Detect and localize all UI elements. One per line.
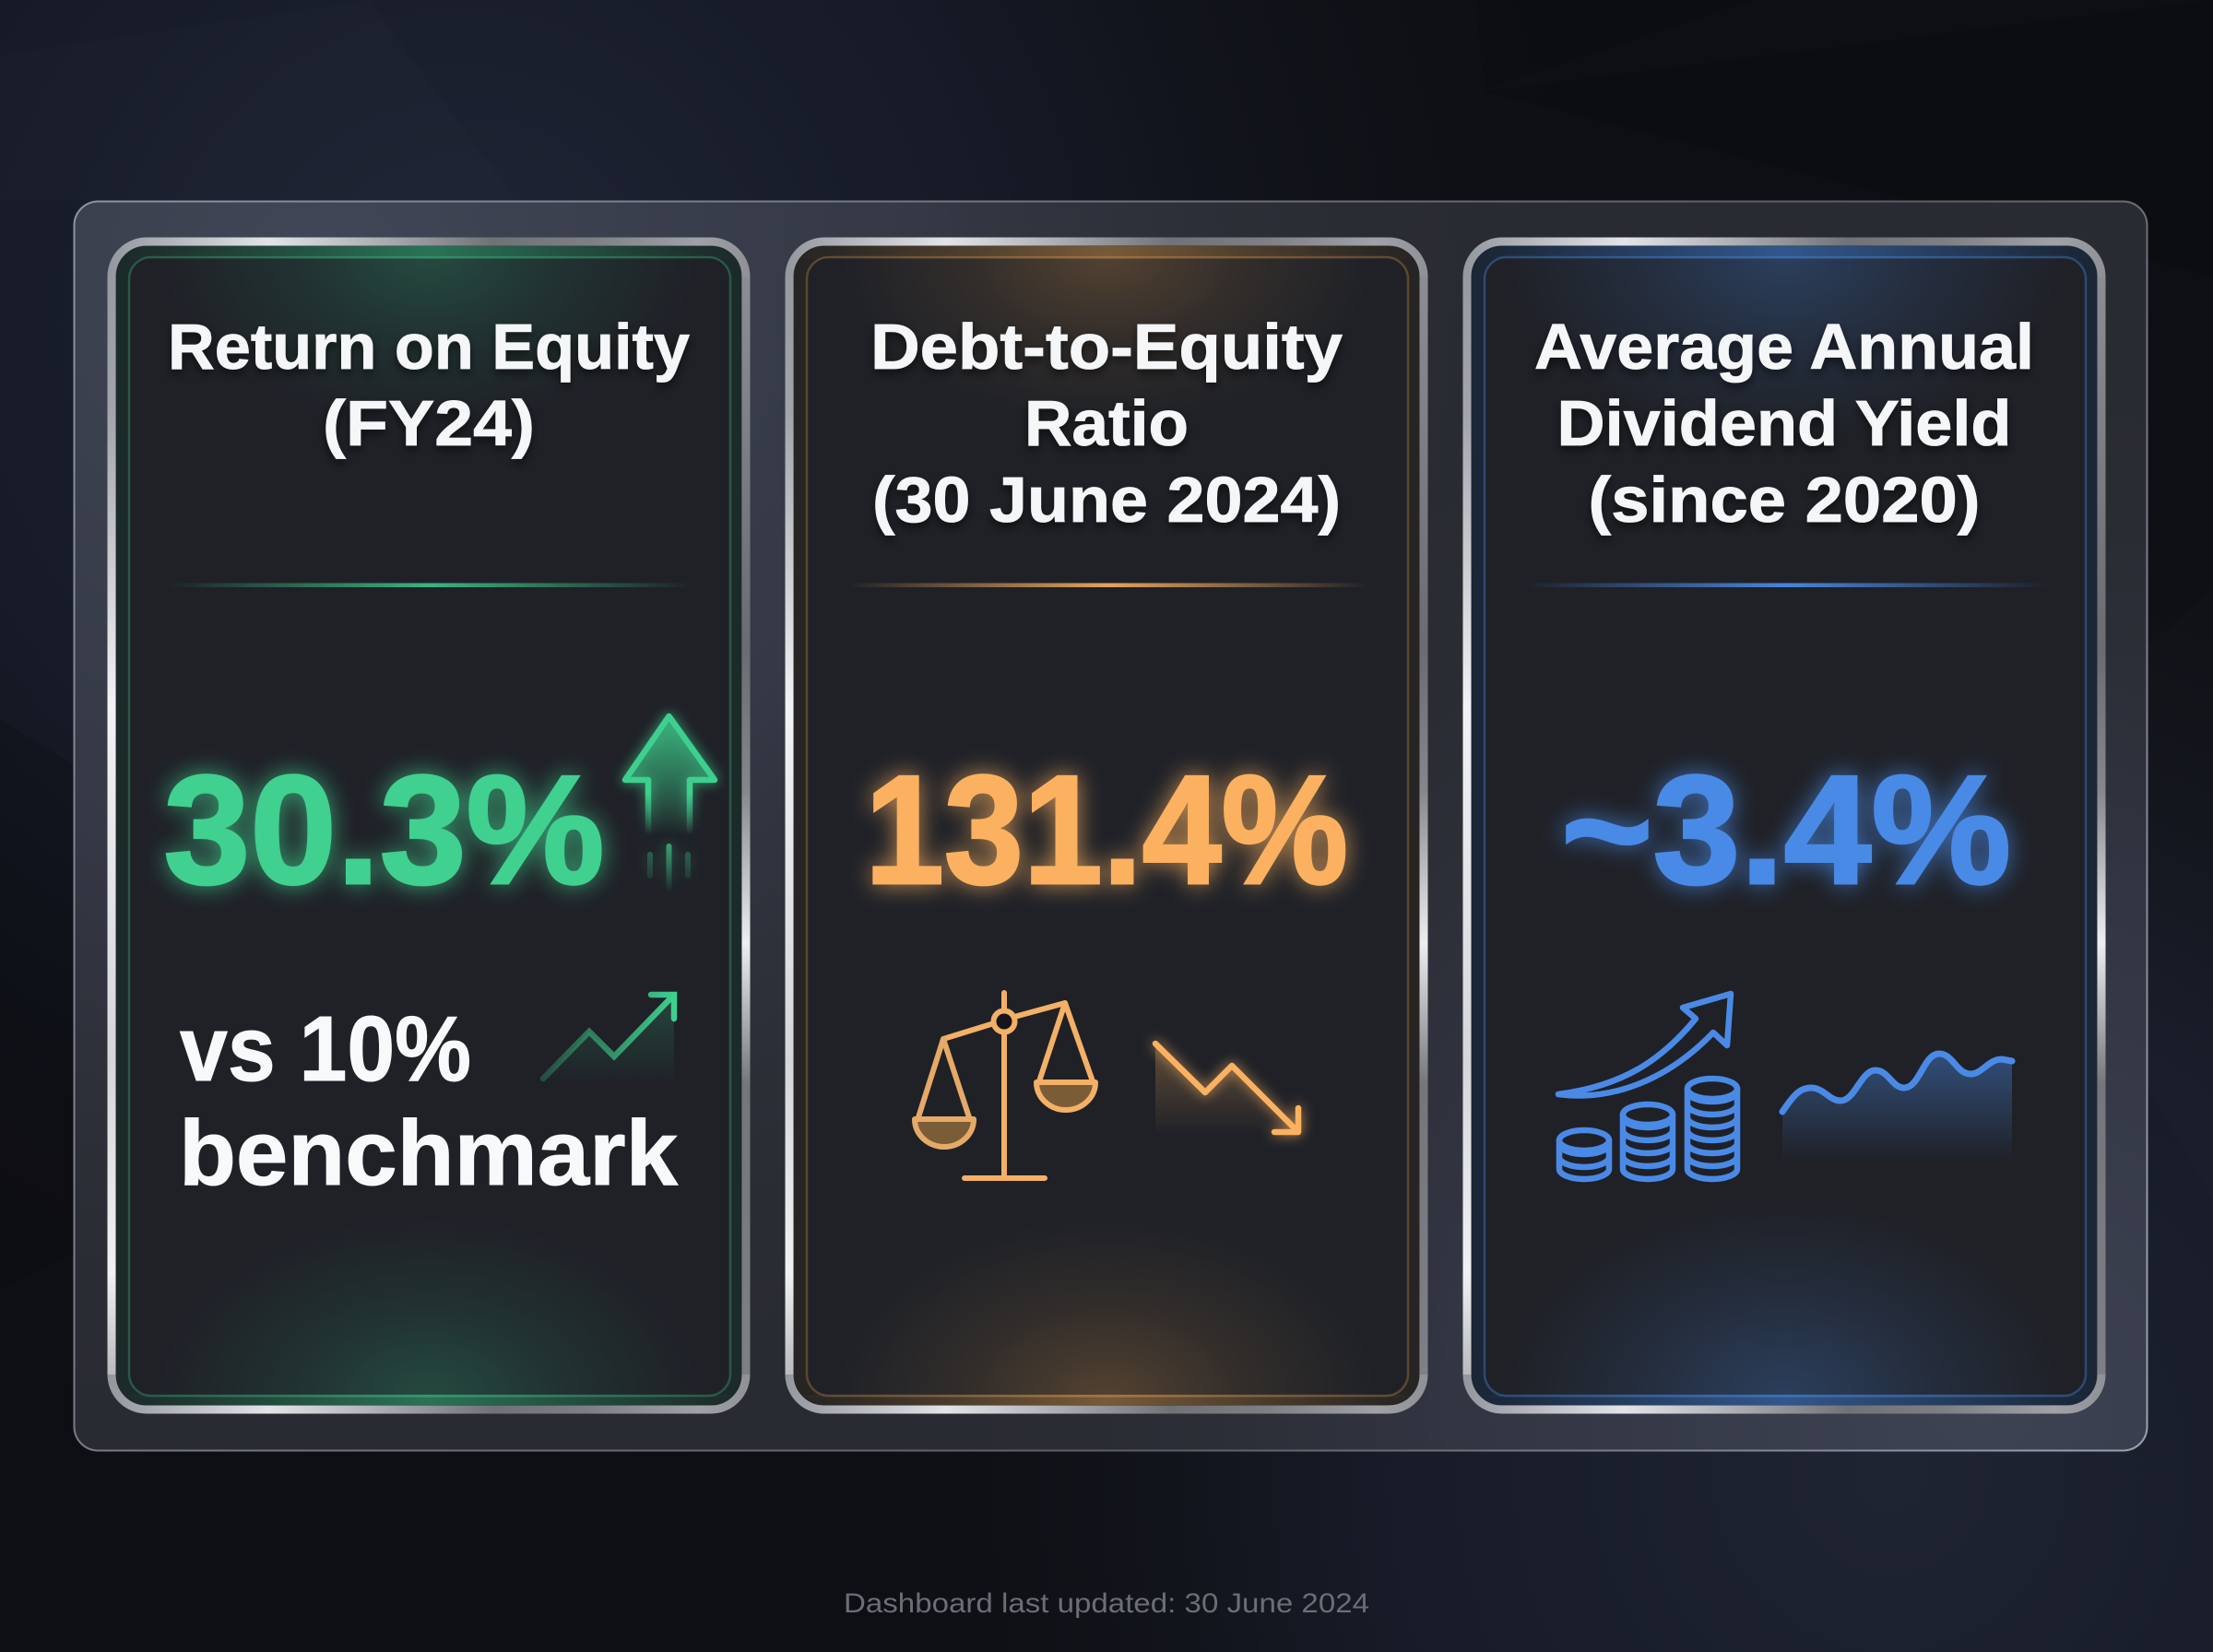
- heading: average annual dividend yield: [1534, 311, 2034, 536]
- icon: area chart: [1782, 1054, 2012, 1162]
- panel: dividend yield card: [1462, 238, 2106, 1414]
- value: 30.3%: 30.3%: [164, 743, 605, 916]
- footer: last updated note: Dashboard last updated: 30 June 2024: [844, 1588, 1369, 1619]
- heading: debt-to-equity ratio: [870, 311, 1343, 536]
- heading: return on equity: Return on Equity: [168, 311, 690, 383]
- label: vs 10% benchmark: [179, 997, 678, 1205]
- value: ~3.4%: ~3.4%: [1561, 743, 2011, 916]
- heading: return on equity: (FY24): [323, 387, 535, 459]
- heading: average annual dividend yield: Average Annual: [1534, 311, 2034, 383]
- divider: amber: [847, 583, 1369, 587]
- divider: green: [170, 583, 692, 587]
- icon: up arrow: [625, 716, 715, 892]
- panel: debt-to-equity card: [786, 238, 1427, 1414]
- value: 131.4%: 131.4%: [865, 743, 1348, 916]
- label: vs 10% benchmark: vs 10%: [180, 997, 471, 1101]
- heading: debt-to-equity ratio: Debt-to-Equity: [870, 311, 1343, 383]
- icon: balance scale: [915, 993, 1095, 1178]
- label: vs 10% benchmark: benchmark: [179, 1102, 678, 1205]
- icon: coin stacks with rising arrow: [1558, 994, 1737, 1179]
- heading: return on equity: [168, 311, 690, 459]
- icon: falling trend line: [1155, 1044, 1298, 1132]
- heading: average annual dividend yield: Dividend Yield: [1556, 387, 2012, 459]
- divider: blue: [1525, 583, 2047, 587]
- panel: return on equity card: [107, 238, 751, 1414]
- heading: debt-to-equity ratio: Ratio: [1024, 387, 1189, 459]
- heading: debt-to-equity ratio: (30 June 2024): [872, 464, 1341, 536]
- icon: rising trend line: [543, 995, 674, 1083]
- heading: average annual dividend yield: (since 2020): [1588, 464, 1981, 536]
- panel: outer glass container: [74, 201, 2148, 1451]
